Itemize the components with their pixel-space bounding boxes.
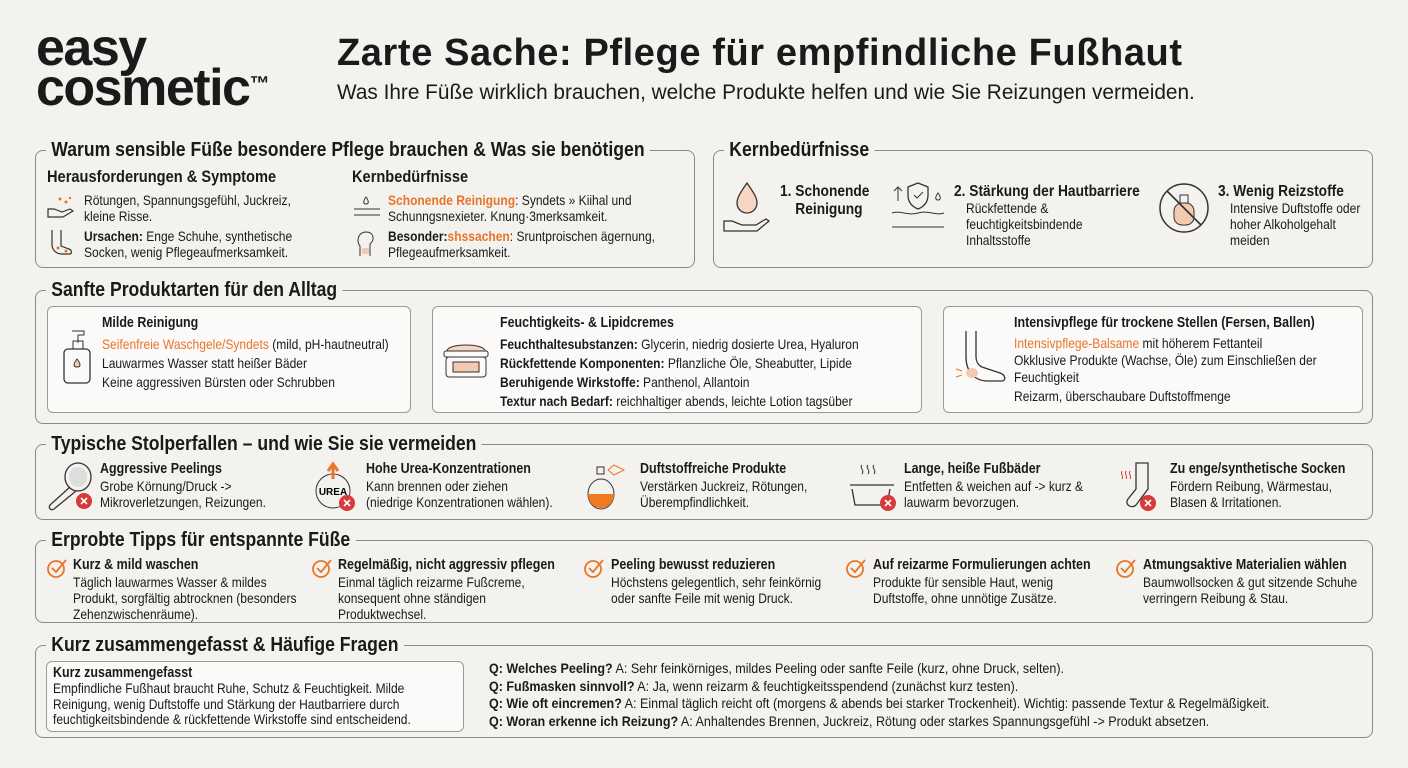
item: fußbäder — [850, 461, 1083, 511]
icon: no perfume — [1159, 183, 1209, 233]
text: need 2 — [954, 183, 1140, 248]
icon: drop hand — [723, 182, 770, 232]
icon: foot heel — [956, 331, 1006, 382]
item: peelings: Grobe Körnung/Druck -> — [100, 478, 231, 494]
panel: faq — [35, 645, 1373, 738]
panel: kernbedürfnisse — [713, 150, 1373, 268]
text: milde reinigung: Lauwarmes Wasser statt heißer Bäder — [102, 355, 307, 371]
item: urea — [316, 461, 553, 511]
summary box: Reinigung, wenig Duftstoffe und Stärkung der Hautbarriere durch — [53, 696, 399, 712]
icon: foot — [51, 230, 72, 255]
logo: easy — [36, 19, 146, 77]
icon: shield — [892, 182, 944, 228]
icon: brush — [48, 462, 92, 510]
tip 2: Regelmäßig, nicht aggressiv pflegen — [338, 557, 555, 573]
panel: faq: Kurz zusammengefasst & Häufige Fragen — [51, 634, 398, 656]
text: schonende: Schonende Reinigung: Syndets » Kiihal und Schunngsnexieter. Knung·3merksamkeit. — [388, 192, 632, 224]
text: cremes: Rückfettende Komponenten: Pflanzliche Öle, Sheabutter, Lipide — [500, 355, 852, 371]
title: Zarte Sache: Pflege für empfindliche Fußhaut — [337, 32, 1183, 74]
tip 1: Zehenzwischenräume). — [73, 606, 198, 622]
text: need 3: Intensive Duftstoffe oder hoher Alkoholgehalt meiden — [1230, 200, 1360, 248]
text: cremes: Feuchthaltesubstanzen: Glycerin, niedrig dosierte Urea, Hyaluron — [500, 336, 859, 352]
item: peelings: Mikroverletzungen, Reizungen. — [100, 494, 266, 510]
tip 1: Produkt, sorgfältig abtrocknen (besonders — [73, 590, 297, 606]
card: feuchtigkeitscremes — [432, 306, 922, 413]
tip 2: Einmal täglich reizarme Fußcreme, — [338, 574, 525, 590]
icon: urea: UREA — [319, 487, 347, 498]
item: urea: Hohe Urea-Konzentrationen — [366, 461, 531, 477]
item: urea: Kann brennen oder ziehen — [366, 478, 508, 494]
text: need 1: 1. Schonende — [780, 183, 869, 200]
icon: urea — [316, 462, 355, 511]
item: socken — [1121, 461, 1345, 511]
panel: warum: Warum sensible Füße besondere Pflege brauchen & Was sie benötigen — [51, 139, 645, 161]
text: besonder: Besonder:shssachen: Sruntproischen ägernung, Pflegeaufmerksamkeit. — [388, 228, 655, 260]
tip 3 — [584, 557, 821, 606]
panel: stolperfallen — [35, 444, 1373, 520]
tip 3: oder sanfte Feile mit wenig Druck. — [611, 590, 793, 606]
icon: layers — [354, 196, 380, 216]
text: need 3 — [1218, 183, 1360, 248]
text: intensivpflege: Intensivpflege für trockene Stellen (Fersen, Ballen) — [1014, 315, 1315, 331]
text: need 1 — [780, 183, 869, 218]
tip 1: Kurz & mild waschen — [73, 557, 198, 573]
tip 4: Duftstoffe, ohne unnötige Zusätze. — [873, 590, 1057, 606]
text: cremes: Beruhigende Wirkstoffe: Panthenol, Allantoin — [500, 374, 749, 390]
text: intensivpflege: Intensivpflege-Balsame mit höherem Fettanteil — [1014, 335, 1262, 351]
tip 5: verringern Reibung & Stau. — [1143, 590, 1288, 606]
heading: herausforderungen: Herausforderungen & Symptome — [47, 167, 276, 186]
text: need 2: feuchtigkeitsbindende — [966, 216, 1083, 232]
text: cremes: Textur nach Bedarf: reichhaltiger abends, leichte Lotion tagsüber — [500, 393, 852, 409]
panel: warum — [35, 150, 695, 268]
tip 5: Atmungsaktive Materialien wählen — [1143, 557, 1347, 573]
text: need 2: Inhaltsstoffe — [966, 232, 1031, 248]
icon: sock — [1121, 462, 1156, 511]
text: intensivpflege — [1014, 315, 1317, 404]
text: need 3: 3. Wenig Reizstoffe — [1218, 183, 1344, 200]
tip 3: Höchstens gelegentlich, sehr feinkörnig — [611, 574, 821, 590]
item: duftstoffe: Verstärken Juckreiz, Rötungen, — [640, 478, 807, 494]
tip 3: Peeling bewusst reduzieren — [611, 557, 775, 573]
icon: perfume — [588, 464, 625, 510]
text: milde reinigung: Seifenfreie Waschgele/Syndets (mild, pH-hautneutral) — [102, 336, 389, 352]
faq list: Q: Fußmasken sinnvoll? A: Ja, wenn reizarm & feuchtigkeitsspendend (zunächst kurz testen). — [489, 678, 1018, 694]
panel: tipps: Erprobte Tipps für entspannte Füße — [51, 529, 350, 551]
text: need 1: Reinigung — [795, 201, 863, 218]
summary box — [46, 661, 464, 732]
text: intensivpflege: Okklusive Produkte (Wachse, Öle) zum Einschließen der Feuchtigkeit — [1014, 352, 1317, 385]
item: fußbäder: Entfetten & weichen auf -> kurz & — [904, 478, 1083, 494]
icon: bowl — [850, 464, 896, 511]
text: cremes — [500, 315, 859, 409]
text: need 2: Rückfettende & — [966, 200, 1048, 216]
logo — [36, 19, 269, 117]
panel: tipps — [35, 540, 1373, 623]
item: socken: Blasen & Irritationen. — [1170, 494, 1282, 510]
text: ursachen: Ursachen: Enge Schuhe, synthetische Socken, wenig Pflegeaufmerksamkeit. — [84, 228, 292, 260]
card: milde reinigung — [47, 306, 411, 413]
tip 1 — [47, 557, 297, 622]
text: intensivpflege: Reizarm, überschaubare Duftstoffmenge — [1014, 388, 1231, 404]
icon: head — [358, 232, 374, 256]
tip 4: Auf reizarme Formulierungen achten — [873, 557, 1091, 573]
tip 2: Produktwechsel. — [338, 606, 426, 622]
faq list: Q: Welches Peeling? A: Sehr feinkörniges, mildes Peeling oder sanfte Feile (kurz, ohne Druck, selten). — [489, 660, 1064, 676]
panel: stolperfallen: Typische Stolperfallen – und wie Sie sie vermeiden — [51, 433, 476, 455]
faq list: Q: Wie oft eincremen? A: Einmal täglich reicht oft (morgens & abends bei starker Trockenheit). Wichtig: passende Textur & Regelmäßigkeit. — [489, 695, 1269, 711]
item: duftstoffe: Duftstoffreiche Produkte — [640, 461, 786, 477]
logo: cosmetic™ — [36, 59, 269, 117]
text: milde reinigung: Milde Reinigung — [102, 315, 198, 331]
card: intensivpflege — [943, 306, 1363, 413]
item: fußbäder: lauwarm bevorzugen. — [904, 494, 1019, 510]
tip 5: Baumwollsocken & gut sitzende Schuhe — [1143, 574, 1357, 590]
icon: cream jar — [444, 344, 488, 378]
item: socken: Zu enge/synthetische Socken — [1170, 461, 1345, 477]
text: need 2: 2. Stärkung der Hautbarriere — [954, 183, 1140, 200]
subtitle: Was Ihre Füße wirklich brauchen, welche Produkte helfen und wie Sie Reizungen vermeiden. — [337, 81, 1195, 104]
summary box: Empfindliche Fußhaut braucht Ruhe, Schutz & Feuchtigkeit. Milde — [53, 680, 404, 696]
text: cremes: Feuchtigkeits- & Lipidcremes — [500, 315, 674, 331]
item: socken: Fördern Reibung, Wärmestau, — [1170, 478, 1332, 494]
panel: produktarten — [35, 290, 1373, 424]
panel: produktarten: Sanfte Produktarten für den Alltag — [51, 279, 337, 301]
icon: pump bottle — [63, 330, 91, 384]
item: duftstoffe — [588, 461, 807, 510]
heading: kernbedürfnisse: Kernbedürfnisse — [352, 167, 468, 186]
summary box: Kurz zusammengefasst — [53, 665, 192, 681]
tip 4 — [846, 557, 1091, 606]
faq list: Q: Woran erkenne ich Reizung? A: Anhaltendes Brennen, Juckreiz, Rötung oder starkes Spannungsgefühl -> Produkt absetzen. — [489, 712, 1209, 728]
tip 5 — [1116, 557, 1357, 606]
tip 2 — [312, 557, 555, 622]
tip 2: konsequent ohne ständigen — [338, 590, 486, 606]
item: urea: (niedrige Konzentrationen wählen). — [366, 494, 553, 510]
item: peelings — [48, 461, 266, 510]
summary box: feuchtigkeitsbindende & rückfettende Wirkstoffe sind entscheidend. — [53, 711, 411, 727]
tip 1: Täglich lauwarmes Wasser & mildes — [73, 574, 267, 590]
text: milde reinigung — [102, 315, 389, 390]
tip 4: Produkte für sensible Haut, wenig — [873, 574, 1053, 590]
panel: kernbedürfnisse: Kernbedürfnisse — [729, 139, 869, 161]
text: milde reinigung: Keine aggressiven Bürsten oder Schrubben — [102, 374, 335, 390]
item: duftstoffe: Überempfindlichkeit. — [640, 494, 749, 510]
text: symptome: Rötungen, Spannungsgefühl, Juckreiz, kleine Risse. — [84, 192, 291, 224]
faq list — [489, 660, 1269, 729]
item: peelings: Aggressive Peelings — [100, 461, 222, 477]
icon: hand — [47, 196, 74, 218]
item: fußbäder: Lange, heiße Fußbäder — [904, 461, 1040, 477]
